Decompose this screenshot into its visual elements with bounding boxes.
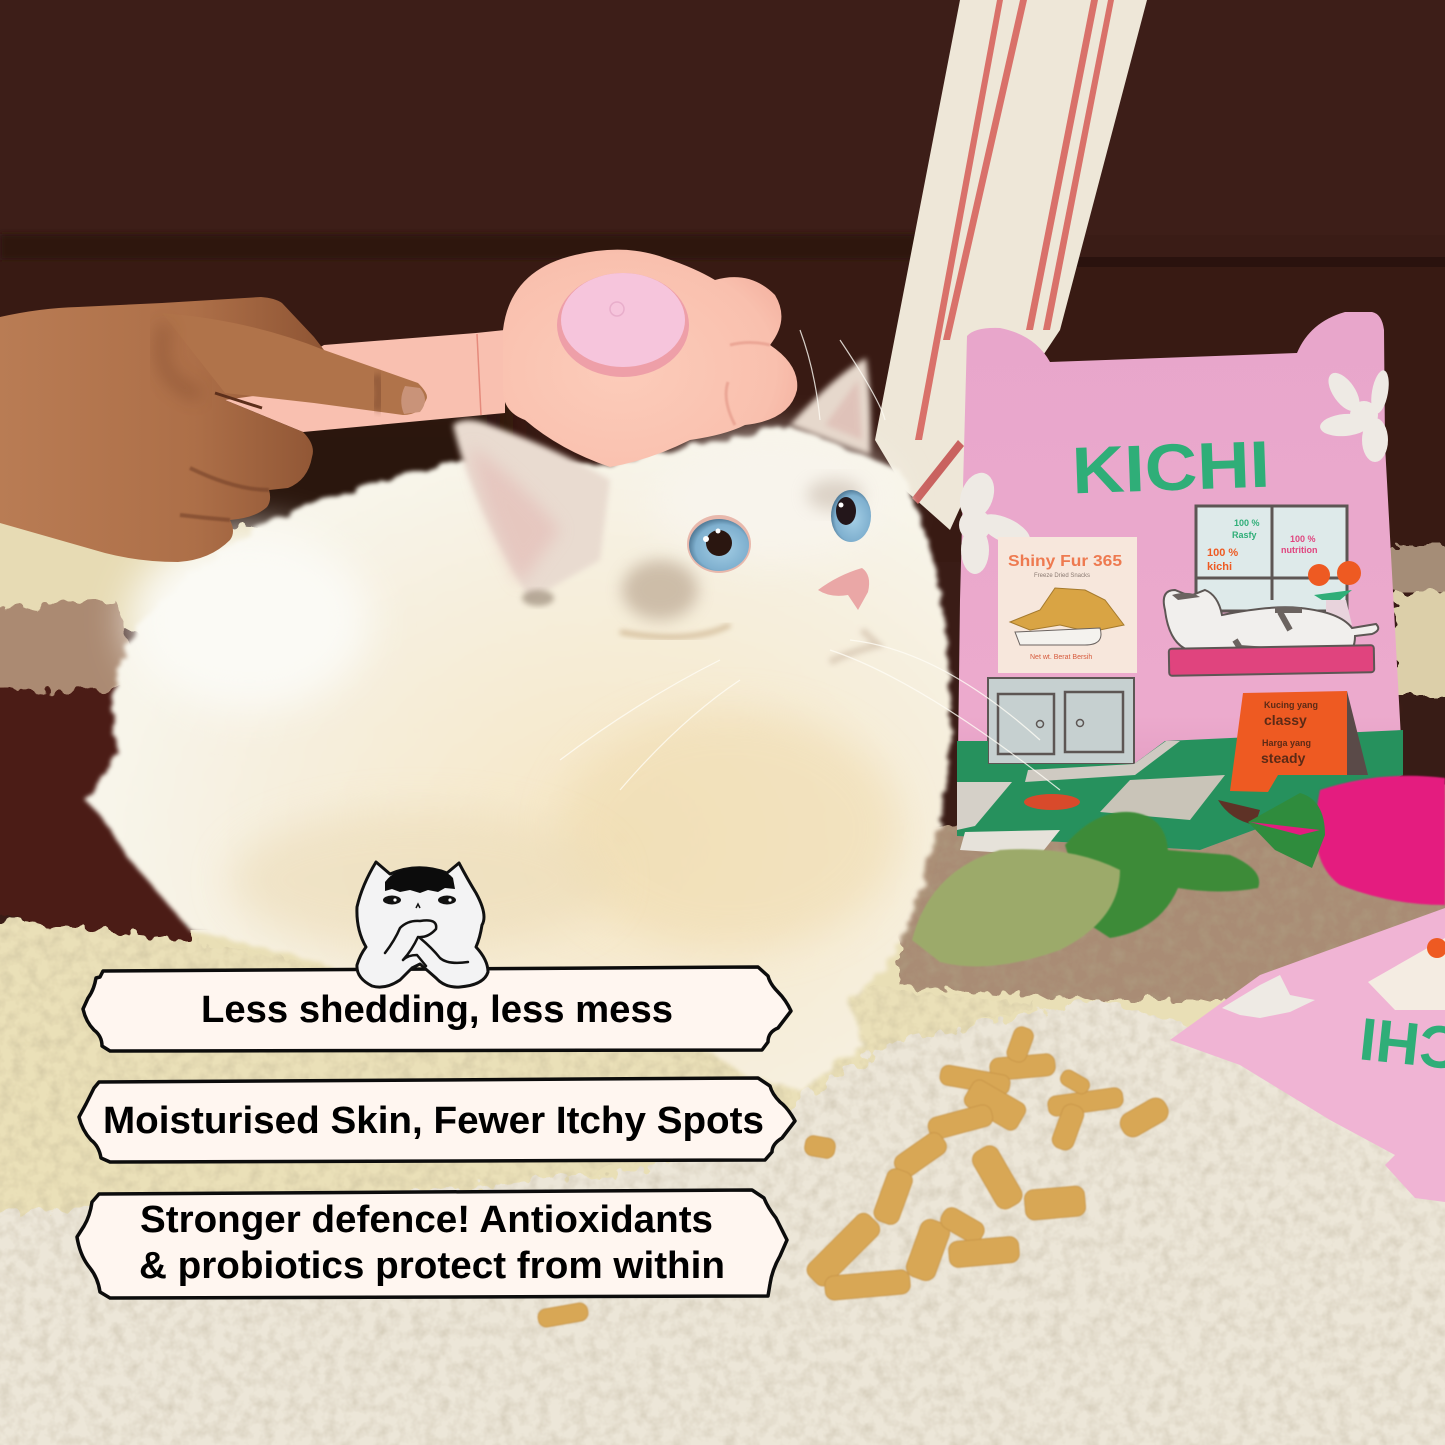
bag cabinet bbox=[988, 678, 1134, 764]
cat whiskers bbox=[560, 330, 1060, 790]
rug: taupe patch bbox=[0, 600, 150, 700]
bag body bbox=[957, 312, 1403, 850]
cat icon outline bbox=[357, 862, 488, 987]
brush button bbox=[557, 273, 689, 377]
second bag body bbox=[1170, 908, 1445, 1202]
bag window: 100 % bbox=[1290, 534, 1316, 544]
cat icon hair bbox=[385, 867, 455, 893]
bag flowers bbox=[954, 368, 1392, 574]
toy: olive pillow bbox=[912, 849, 1120, 966]
product bag bbox=[954, 312, 1403, 855]
rug: brown right area bbox=[900, 780, 1445, 1000]
rug: cream base bbox=[0, 930, 1445, 1230]
pink grooming brush bbox=[225, 250, 797, 467]
rug bbox=[0, 510, 1445, 1445]
second bag label bbox=[1368, 938, 1445, 1010]
rug: yellow cream band bbox=[0, 915, 1040, 1222]
banner: less shedding bbox=[83, 967, 791, 1051]
bag product label: Net wt. Berat Bersih bbox=[1030, 654, 1092, 661]
bag window bbox=[1196, 506, 1347, 611]
bag window: 100 % bbox=[1234, 518, 1260, 528]
hand palm and fingers bbox=[0, 297, 324, 562]
cat right ear bbox=[790, 358, 870, 455]
cat left ear bbox=[453, 420, 610, 606]
bag window: kichi bbox=[1207, 561, 1232, 573]
cat warm chest shading bbox=[560, 710, 900, 950]
bag flowers in vase bbox=[1308, 561, 1361, 625]
rug: right rear patches bbox=[1390, 545, 1445, 590]
rug: cream patch top left bbox=[0, 510, 300, 640]
hand knuckle shadows bbox=[162, 325, 200, 395]
hand holding brush bbox=[0, 297, 427, 562]
bag orange sign: Kucing yang bbox=[1264, 700, 1318, 710]
banner: moisturised skin: Moisturised Skin, Fewer Itchy Spots bbox=[103, 1100, 764, 1142]
bag window: 100 % bbox=[1207, 547, 1238, 559]
bag pink shelf bbox=[1169, 645, 1374, 676]
banner: less shedding: Less shedding, less mess bbox=[201, 989, 673, 1031]
brush lobe crease bbox=[726, 342, 770, 425]
bag product label: Shiny Fur 365 bbox=[1008, 553, 1122, 570]
banner: stronger defence: & probiotics protect from within bbox=[139, 1245, 725, 1287]
cat body bbox=[85, 425, 951, 1092]
bag orange sign: classy bbox=[1264, 712, 1307, 728]
cat mouth bbox=[830, 630, 878, 662]
bag window: Rasfy bbox=[1232, 530, 1257, 540]
rug: dark brown patch bbox=[0, 690, 190, 942]
cat left eye bbox=[687, 515, 751, 573]
cat icon paws bbox=[385, 920, 468, 966]
sofa background bbox=[0, 0, 1445, 600]
rug: white shag bbox=[0, 1000, 1445, 1445]
second bag flower bbox=[1222, 975, 1315, 1018]
cat bbox=[85, 330, 1060, 1092]
banner: moisturised skin bbox=[79, 1078, 795, 1162]
bag green and white floor bbox=[957, 730, 1403, 855]
cat right eye bbox=[831, 490, 871, 542]
banner: stronger defence: Stronger defence! Antioxidants bbox=[140, 1199, 713, 1241]
cat face markings bbox=[622, 560, 698, 620]
icon: cartoon cat with clasped paws bbox=[357, 862, 488, 987]
cat icon nose bbox=[416, 904, 420, 908]
second bag lying on rug bbox=[1170, 908, 1445, 1202]
spilled treats bbox=[537, 1025, 1172, 1328]
bag logo: KICHI bbox=[1071, 427, 1271, 507]
brush handle bbox=[225, 330, 505, 432]
bag window: nutrition bbox=[1281, 545, 1318, 555]
bag orange sign bbox=[1230, 691, 1368, 792]
banner: stronger defence bbox=[77, 1190, 787, 1298]
striped towel bbox=[875, 0, 1147, 530]
hand fingernail bbox=[401, 386, 425, 414]
bag product label bbox=[998, 537, 1137, 673]
brush head bbox=[503, 250, 797, 467]
bag product label: Freeze Dried Snacks bbox=[1034, 573, 1090, 579]
bag illustrated cat bbox=[1164, 590, 1378, 652]
toy: green cactus bbox=[1065, 812, 1259, 938]
bag orange sign: Harga yang bbox=[1262, 738, 1311, 748]
hand index finger bbox=[162, 313, 427, 415]
toy: pink radish bbox=[1218, 776, 1445, 905]
bag orange sign: steady bbox=[1261, 750, 1306, 766]
cat icon eyes bbox=[383, 896, 401, 904]
cat nose bbox=[818, 568, 869, 610]
